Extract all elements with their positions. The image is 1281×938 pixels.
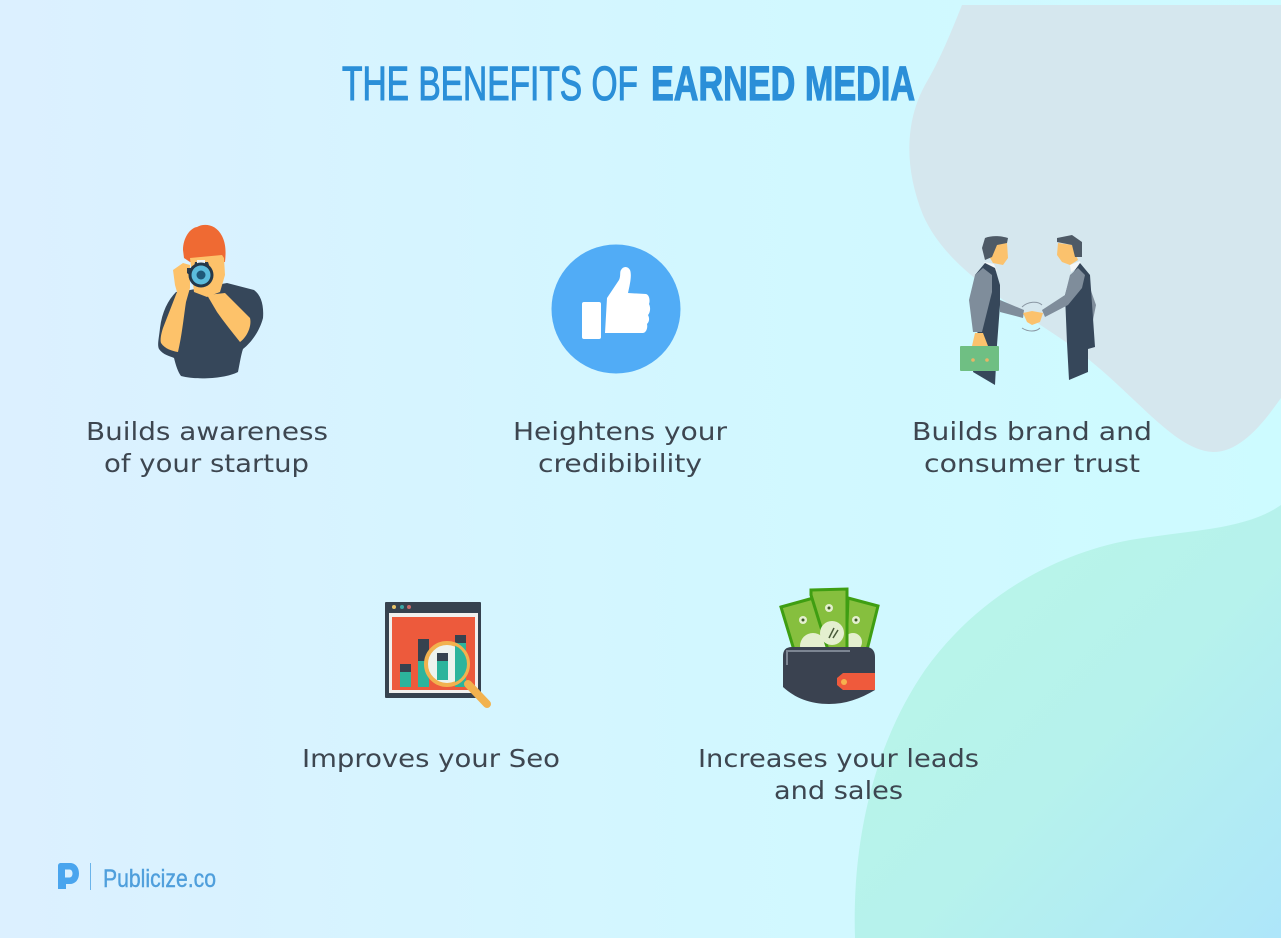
wallet xyxy=(783,647,875,704)
heightens label xyxy=(513,417,728,478)
grey blob xyxy=(909,5,1281,452)
right bill xyxy=(846,598,878,650)
logo mark xyxy=(58,863,79,889)
builds awareness label: Builds awareness xyxy=(86,417,328,446)
logo text: Publicize.co xyxy=(103,865,216,893)
left man head xyxy=(990,243,1008,265)
increases leads label: and sales xyxy=(774,776,903,805)
left man vest xyxy=(973,263,1000,385)
increases leads label xyxy=(698,744,979,805)
builds awareness label: of your startup xyxy=(104,449,309,478)
builds brand label: consumer trust xyxy=(924,449,1140,478)
motion arcs xyxy=(1022,302,1042,331)
improves seo label: Improves your Seo xyxy=(302,744,560,773)
left arm xyxy=(161,263,190,352)
builds brand label: Builds brand and xyxy=(912,417,1152,446)
left hand and briefcase xyxy=(972,333,988,346)
hair xyxy=(183,225,226,262)
title: THE BENEFITS OF xyxy=(342,58,638,111)
face xyxy=(190,255,225,297)
icon: thumbs up xyxy=(552,244,680,374)
heightens label: credibibility xyxy=(538,449,702,478)
logo divider xyxy=(90,863,91,890)
teal blob xyxy=(855,505,1281,938)
shirt xyxy=(158,283,263,378)
logo xyxy=(58,863,216,893)
hands xyxy=(1023,311,1043,325)
right arm xyxy=(207,293,250,342)
icon: photographer xyxy=(158,225,263,378)
icon: wallet with cash xyxy=(781,589,878,704)
right man sleeve xyxy=(1042,268,1085,317)
heightens label: Heightens your xyxy=(513,417,728,446)
builds brand label xyxy=(912,417,1152,478)
icon: handshake xyxy=(960,235,1096,385)
left man sleeve xyxy=(969,268,992,332)
middle bill xyxy=(811,589,847,650)
left man forearm xyxy=(1000,300,1024,318)
wallet clasp xyxy=(837,673,875,690)
right man back xyxy=(1090,288,1096,325)
right man vest xyxy=(1065,263,1095,380)
right man head xyxy=(1057,243,1078,265)
increases leads label: Increases your leads xyxy=(698,744,979,773)
magnifier xyxy=(468,684,487,704)
icon: seo chart xyxy=(385,602,487,704)
left bill xyxy=(781,597,832,650)
builds awareness label xyxy=(86,417,328,478)
camera xyxy=(187,262,213,280)
title: EARNED MEDIA xyxy=(651,58,915,111)
bars xyxy=(400,664,411,687)
